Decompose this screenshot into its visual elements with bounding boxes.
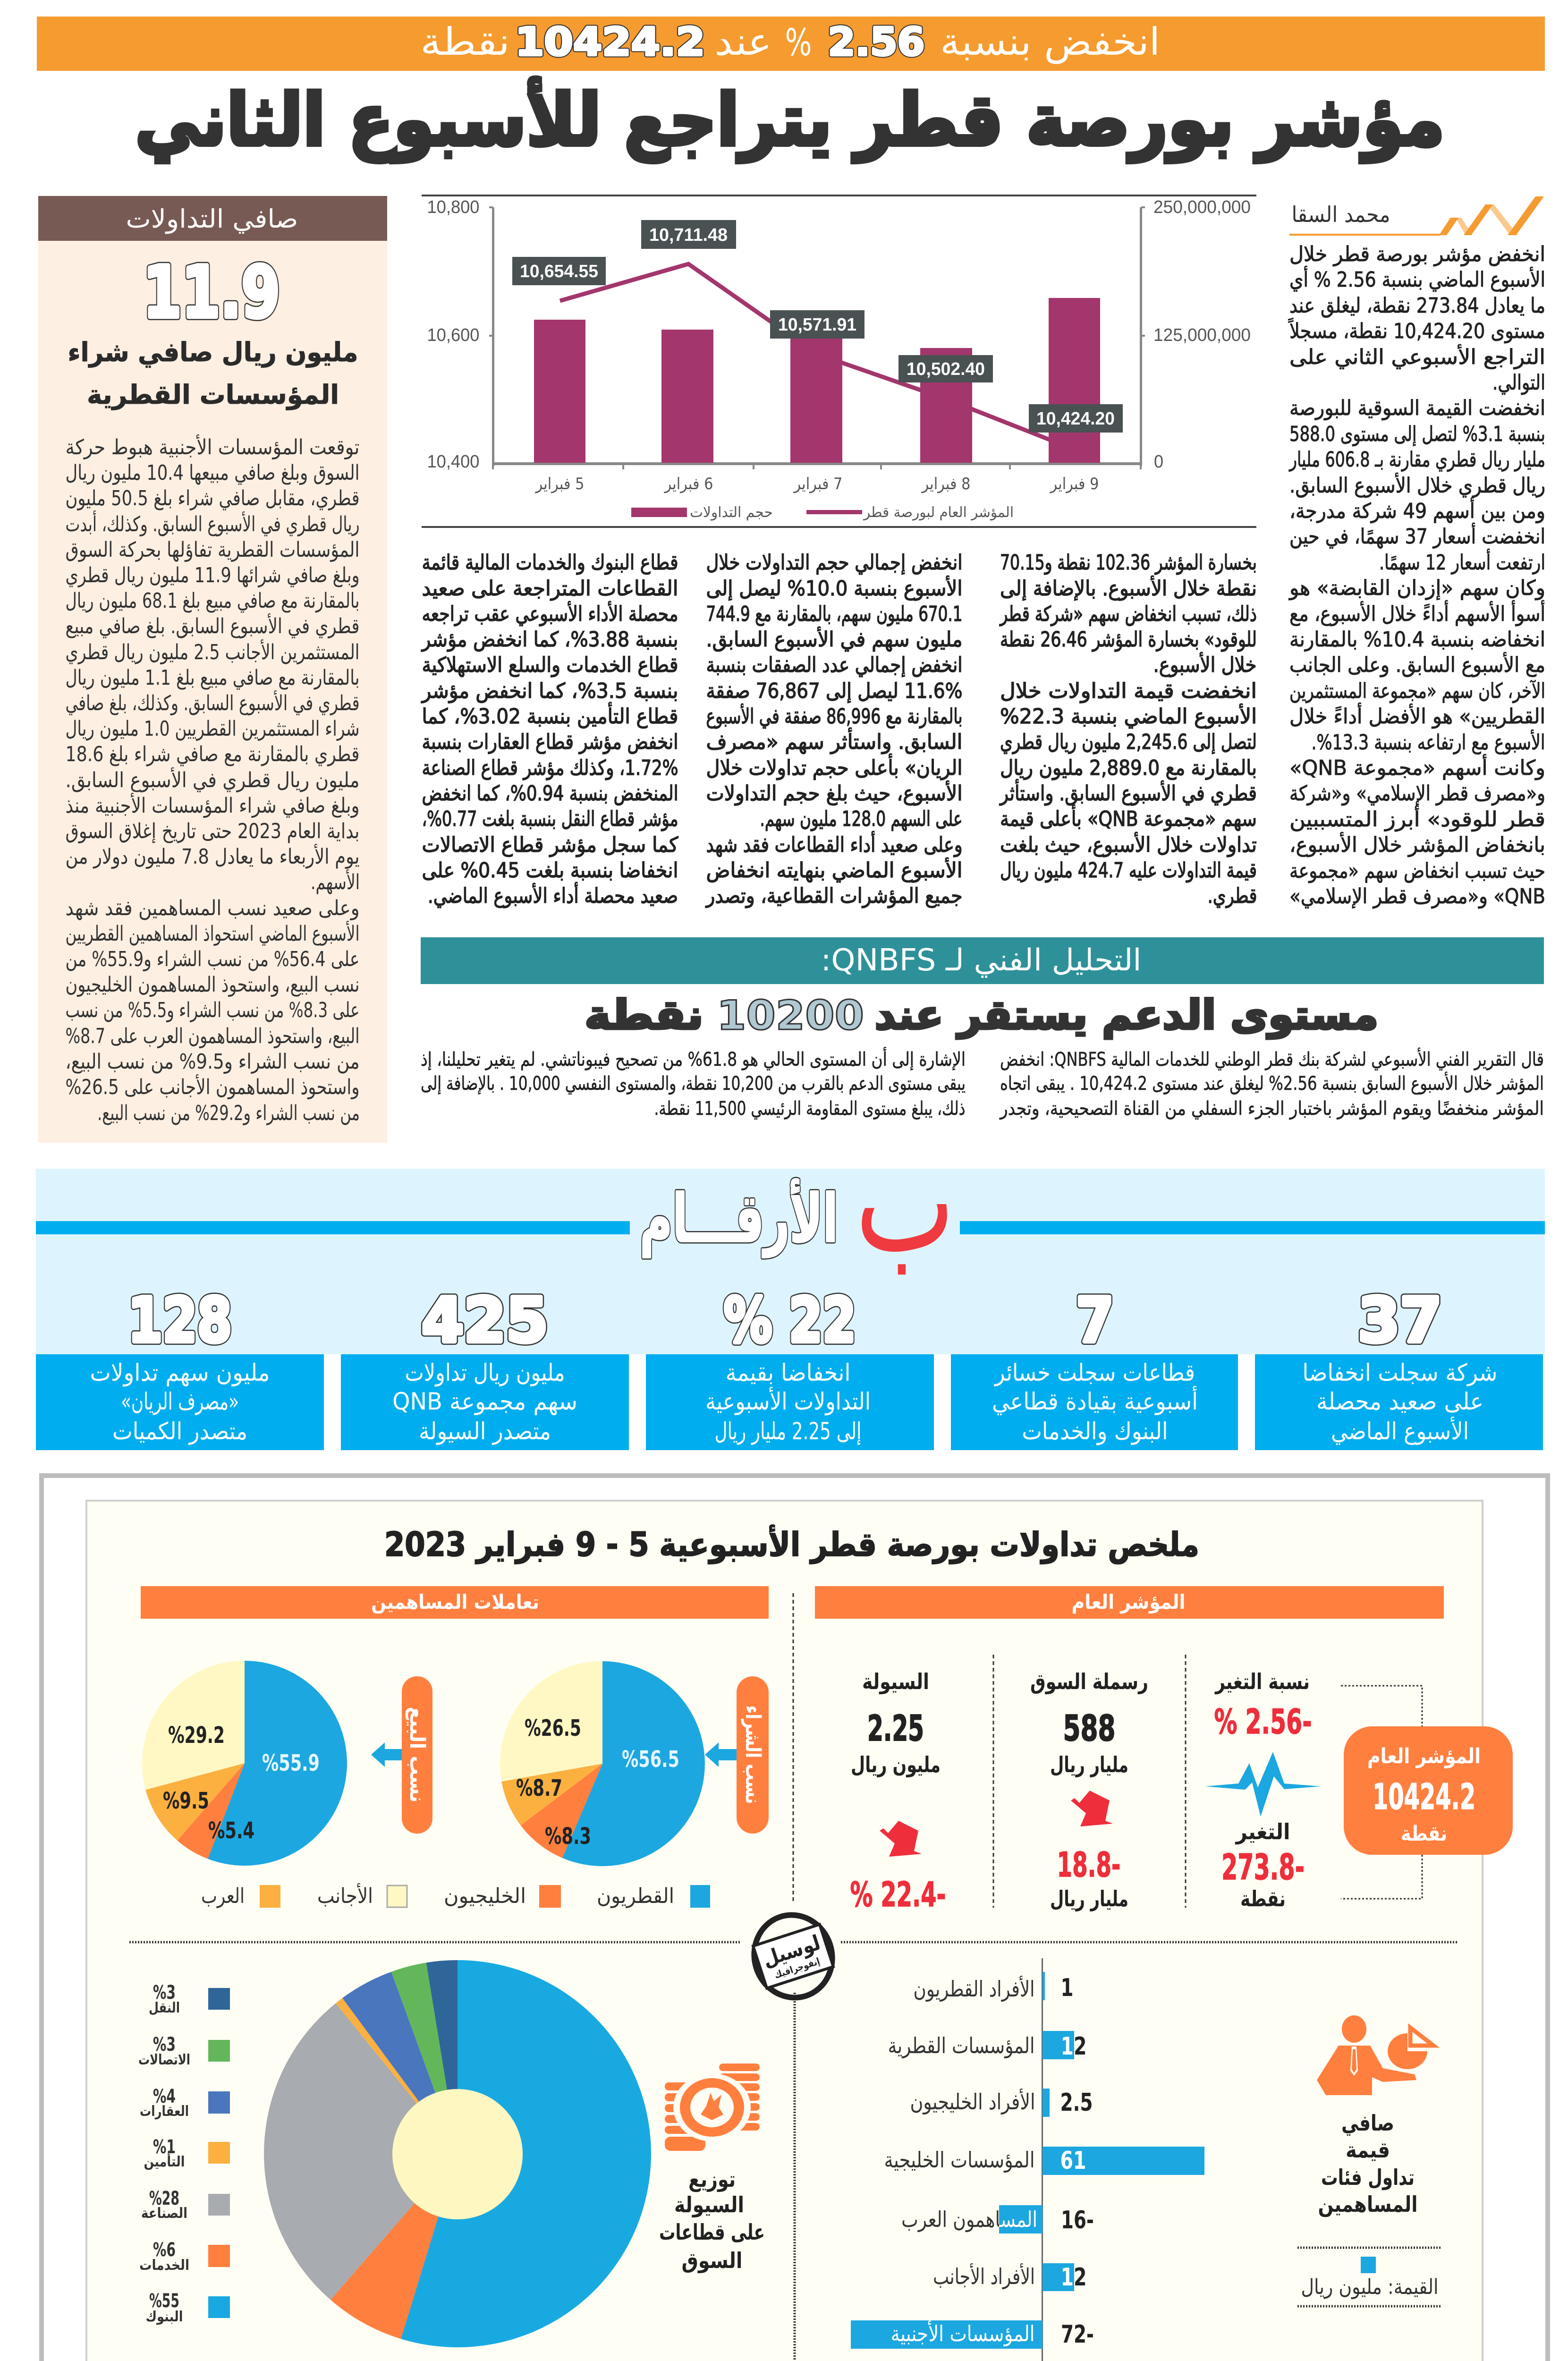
middle article column C: محصلة الأداء الأسبوعي عقب تراجعه	[422, 601, 678, 626]
panel body text: قطري بالمقارنة مع صافي شراء بلغ 18.6	[65, 742, 360, 766]
donut legend: الصناعة	[141, 2205, 187, 2222]
right column article text: انخفض مؤشر بورصة قطر خلال	[1289, 242, 1545, 266]
section heading: الأرقـــام	[640, 1179, 838, 1257]
pie legend: العرب	[201, 1884, 245, 1908]
panel body text: ريال قطري في الأسبوع السابق. وكذلك، أبدت	[65, 510, 360, 536]
stat: 37: شركة سجلت انخفاضا	[1302, 1359, 1498, 1386]
stat: 7: 7	[1076, 1284, 1114, 1356]
right column article text: QNB» و«مصرف قطر الإسلامي»	[1289, 884, 1545, 909]
panel body text: المستثمرين الأجانب 2.5 مليون ريال قطري	[66, 639, 360, 664]
header: shareholder transactions: تعاملات المساهمين	[371, 1590, 539, 1614]
middle article column A: ذلك، تسبب انخفاض سهم «شركة قطر	[999, 602, 1257, 626]
middle article column A: تداولات خلال الأسبوع، حيث بلغت	[1000, 832, 1257, 857]
bar: foreign individuals: الأفراد الأجانب	[933, 2263, 1035, 2290]
middle article column A: نقطة خلال الأسبوع. بالإضافة إلى	[1000, 575, 1257, 601]
x axis labels: 6 فبراير	[664, 475, 713, 493]
panel body text: واستحوذ المساهمون الأجانب على 26.5%	[65, 1074, 360, 1099]
section heading: ب	[855, 1119, 955, 1284]
donut title: توزيع	[688, 2166, 736, 2192]
middle article column A: قطري.	[1208, 884, 1257, 908]
panel body text: على 8.3% من نسب الشراء و5.5% من نسب	[65, 998, 360, 1022]
middle article column B	[705, 551, 962, 908]
middle article column C	[421, 551, 678, 908]
x axis labels: 9 فبراير	[1050, 475, 1099, 493]
chart legend: المؤشر العام لبورصة قطر	[863, 504, 1014, 521]
pie chart: sell shares: %5.4	[208, 1817, 254, 1844]
technical analysis heading: نقطة	[585, 992, 703, 1039]
stat: 22 percent: التداولات الأسبوعية	[705, 1387, 871, 1416]
icon: pulse	[1205, 1752, 1322, 1817]
header: general index: المؤشر العام	[1072, 1590, 1185, 1614]
middle article column C: صعيد محصلة أداء الأسبوع الماضي.	[428, 882, 678, 908]
stat: 128: 128	[128, 1284, 232, 1356]
donut legend: %28	[149, 2188, 179, 2209]
general index callout box: نقطة	[1401, 1822, 1447, 1846]
middle article column A: لتصل إلى 2,245.6 مليون ريال قطري	[1000, 730, 1257, 754]
right column article text: التوالي.	[1492, 371, 1545, 395]
panel body text: السوق وبلغ صافي مبيعها 10.4 مليون ريال	[66, 461, 360, 485]
volume bars	[534, 298, 1100, 463]
bar: Arab investors: 16-	[1061, 2206, 1094, 2234]
stat: 37: الأسبوع الماضي	[1331, 1417, 1469, 1445]
pie chart: buy shares: %8.7	[516, 1775, 562, 1801]
stat: 37	[1255, 1284, 1543, 1450]
data labels: 10,711.48	[649, 225, 728, 245]
general index callout box	[1341, 1686, 1513, 1899]
middle article column B: انخفض إجمالي عدد الصفقات بنسبة	[706, 653, 962, 677]
donut title	[659, 2166, 765, 2273]
panel body text: بداية العام 2023 حتى تاريخ إغلاق السوق	[65, 819, 359, 843]
bar chart title	[1318, 2110, 1417, 2217]
panel: net trading	[38, 196, 387, 1143]
pill: sell shares: نسب البيع	[405, 1707, 429, 1803]
right column article text: ما يعادل 273.84 نقطة، ليغلق عند	[1289, 294, 1545, 318]
panel body text: نسب البيع، واستحوذ المساهمون الخليجيون	[65, 973, 360, 997]
stat: 22 percent: انخفاضا بقيمة	[725, 1359, 851, 1386]
chart axes	[489, 206, 1145, 469]
middle article column A: انخفضت قيمة التداولات خلال	[1000, 679, 1257, 703]
stat: 128	[36, 1284, 324, 1450]
left axis labels: 10,400	[427, 452, 480, 472]
right column article text: وكانت أسهم «مجموعة QNB»	[1289, 754, 1545, 780]
donut title: على قطاعات	[659, 2219, 765, 2245]
middle article column C: المنخفض بنسبة 0.94%، كما انخفض	[422, 781, 678, 806]
metric: rate of change: 273.8-	[1221, 1846, 1305, 1888]
bar chart title: تداول فئات	[1321, 2165, 1415, 2190]
stat: 37: على صعيد محصلة	[1316, 1388, 1483, 1415]
right column article text: قطر للوقود» أبرز المتسببين	[1289, 806, 1545, 832]
donut legend: %4	[153, 2086, 176, 2107]
middle article column B: بالمقارنة مع 86,996 صفقة في الأسبوع	[706, 703, 962, 729]
middle article column B: الأسبوع الماضي بنهايته انخفاض	[706, 857, 962, 883]
metric: market cap: 18.8-	[1057, 1845, 1121, 1885]
middle article column B: 670.1 مليون سهم، بالمقارنة مع 744.9	[706, 602, 962, 626]
panel subheading: المؤسسات القطرية	[87, 380, 339, 410]
middle article column C: كما سجل مؤشر قطاع الاتصالات	[422, 833, 678, 857]
middle article column B: مليون سهم في الأسبوع السابق.	[706, 626, 962, 652]
arrow: buy to pie	[705, 1742, 737, 1767]
bar: Qatari institutions: 12	[1060, 2032, 1087, 2061]
bar: Gulf institutions	[884, 2147, 1204, 2175]
middle article column C: انخفاضا بنسبة بلغت 0.45% على	[422, 858, 678, 883]
metric: rate of change: نسبة التغير	[1214, 1669, 1310, 1694]
middle article column C: قطاع الخدمات والسلع الاستهلاكية	[422, 653, 678, 677]
stat: 425: متصدر السيولة	[419, 1418, 551, 1445]
bar: foreign individuals: 12	[1060, 2263, 1087, 2292]
middle article column B: انخفض إجمالي حجم التداولات خلال	[706, 551, 962, 575]
main title: مؤشر بورصة قطر يتراجع للأسبوع الثاني	[135, 77, 1445, 162]
stat: 7: البنوك والخدمات	[1022, 1418, 1168, 1445]
metric: rate of change: % 2.56-	[1214, 1702, 1312, 1741]
stat: 425: 425	[422, 1284, 548, 1356]
middle article column A: قيمة التداولات عليه 424.7 مليون ريال	[1000, 858, 1257, 883]
technical analysis text, left	[421, 1047, 966, 1120]
panel body text: المؤسسات القطرية تفاؤلها بحركة السوق	[65, 538, 360, 562]
bar chart legend: القيمة: مليون ريال	[1301, 2275, 1438, 2299]
middle article column C: بنسبة 3.5%، كما انخفض مؤشر	[421, 679, 678, 703]
x axis labels: 5 فبراير	[535, 475, 585, 493]
bar: Gulf institutions: 61	[1060, 2147, 1086, 2175]
panel body text: الأسهم.	[311, 869, 360, 894]
middle article column C: مؤشر قطاع النقل بنسبة بلغت 0.77%،	[422, 807, 678, 831]
bar: foreign institutions: 72-	[1061, 2320, 1094, 2349]
author byline	[1289, 196, 1544, 236]
author byline: محمد السقا	[1292, 202, 1390, 227]
metric: liquidity: مليون ريال	[851, 1752, 941, 1777]
bar: Qatari individuals: 1	[1060, 1974, 1074, 2002]
metric: liquidity	[850, 1669, 946, 1914]
donut chart: liquidity by sector	[264, 1960, 651, 2347]
top banner: عند	[715, 20, 771, 64]
general index callout box: المؤشر العام	[1367, 1744, 1481, 1768]
metric: market cap: رسملة السوق	[1030, 1669, 1148, 1694]
panel header: صافي التداولات	[126, 204, 298, 234]
stat: 22 percent: % 22	[724, 1284, 856, 1356]
middle article column C: قطاع التأمين بنسبة 3.02%، كما	[422, 702, 678, 729]
middle article column A: بخسارة المؤشر 102.36 نقطة و70.15	[1000, 551, 1257, 575]
metric: liquidity: السيولة	[862, 1669, 929, 1694]
right column article text: وكان سهم «إزدان القابضة» هو	[1288, 576, 1545, 600]
metric: market cap: 588	[1063, 1707, 1115, 1749]
panel body text: شراء المستثمرين القطريين 1.0 مليون ريال	[65, 717, 360, 741]
metric: market cap	[1030, 1669, 1148, 1911]
panel header	[38, 196, 387, 241]
panel body text: قطري في الأسبوع السابق. وكذلك، بلغ صافي	[65, 690, 360, 715]
panel subheading: مليون ريال صافي شراء	[68, 337, 358, 368]
top banner: 10424.2	[515, 20, 705, 65]
middle article column A: قطري في الأسبوع السابق. واستأثر	[999, 779, 1257, 806]
panel body text: وبلغ صافي شرائها 11.9 مليون ريال قطري	[65, 563, 360, 587]
donut legend: الاتصالات	[138, 2052, 190, 2068]
metric: rate of change	[1205, 1669, 1322, 1911]
bar: Gulf individuals: 2.5	[1060, 2089, 1093, 2117]
metric: liquidity: 2.25	[867, 1707, 924, 1749]
panel body text: مليون ريال قطري في الأسبوع السابق.	[65, 767, 360, 792]
stat: 128: مليون سهم تداولات	[90, 1359, 270, 1387]
stamp: Lusail infographic: لوسيل	[760, 1930, 823, 1972]
panel body text: البيع، واستحوذ المساهمون العرب على 8.7%	[65, 1024, 359, 1048]
right column article text: انخفضت القيمة السوقية للبورصة	[1289, 396, 1545, 420]
arrow: sell to pie	[371, 1742, 402, 1767]
bar: Qatari institutions: المؤسسات القطرية	[888, 2033, 1035, 2059]
pie legend	[201, 1883, 710, 1908]
stat: 7: 7	[1076, 1284, 1114, 1356]
middle article column B: جميع المؤشرات القطاعية، وتصدر	[705, 884, 962, 908]
big number 11.9: 11.9	[143, 252, 280, 334]
stat: 425: 425	[422, 1284, 548, 1356]
pie chart: sell shares	[142, 1661, 347, 1866]
bar: Arab investors: المساهمون العرب	[901, 2207, 1037, 2233]
bar: Qatari institutions: 12	[1060, 2032, 1087, 2061]
donut legend: %55	[149, 2290, 179, 2312]
icon: coins	[665, 2064, 760, 2151]
icon: red down arrow	[1071, 1791, 1113, 1826]
middle article column A: خلال الأسبوع.	[1153, 652, 1257, 677]
bar: Gulf individuals: الأفراد الخليجيون	[910, 2088, 1035, 2115]
stat: 22 percent: % 22	[724, 1284, 856, 1356]
middle article column B: الأسبوع، حيث بلغ حجم التداولات	[706, 780, 962, 806]
donut legend: العقارات	[140, 2103, 189, 2120]
pie chart: buy shares	[500, 1661, 705, 1866]
bar: foreign individuals: 12	[1060, 2263, 1087, 2292]
middle article column B: الريان» بأعلى حجم تداولات خلال	[706, 753, 962, 780]
panel body text: على 56.4% من نسب الشراء و55.9% من	[65, 947, 360, 971]
metric: liquidity: % 22.4-	[850, 1875, 946, 1914]
bar chart title: قيمة	[1346, 2137, 1390, 2163]
donut legend: البنوك	[145, 2309, 183, 2325]
panel: by the numbers	[36, 1119, 1545, 1450]
bar: foreign institutions	[851, 2320, 1094, 2349]
middle article column A: بالمقارنة مع 2,889.0 مليون ريال	[1000, 756, 1257, 780]
middle article column B: وعلى صعيد أداء القطاعات فقد شهد	[706, 831, 962, 857]
pie chart: buy shares: %56.5	[622, 1746, 679, 1773]
bar chart title: المساهمين	[1318, 2191, 1417, 2217]
metric: market cap: مليار ريال	[1050, 1752, 1128, 1777]
data labels	[512, 220, 1123, 433]
technical analysis banner	[421, 937, 1544, 984]
data labels: 10,571.91	[778, 315, 856, 335]
pie legend: القطريون	[597, 1884, 674, 1908]
technical analysis text, left: يبقى مستوى الدعم بالقرب من 10,200 نقطة، والمستوى النفسي 10,000 . بالإضافة إلى	[421, 1073, 966, 1095]
icon: red down arrow	[880, 1821, 922, 1857]
bar chart title: صافي	[1341, 2110, 1394, 2136]
icon: zigzag trend	[1439, 196, 1544, 235]
stat: 37: 37	[1358, 1284, 1442, 1356]
panel body text: بالمقارنة مع صافي مبيع بلغ 68.1 مليون ريال	[66, 589, 360, 613]
top banner: انخفض بنسبة	[940, 20, 1160, 64]
bar chart legend	[1297, 2248, 1441, 2306]
right column article text: القطريين» هو الأفضل أداءً خلال	[1289, 703, 1545, 729]
technical analysis banner: التحليل الفني لـ QNBFS:	[821, 943, 1142, 978]
panel body text: من نسب الشراء و9.5% من نسب البيع،	[66, 1050, 360, 1074]
middle article column A: الأسبوع الماضي بنسبة 22.3%	[1000, 703, 1257, 729]
bar: foreign institutions: المؤسسات الأجنبية	[890, 2320, 1035, 2347]
technical analysis text, right	[999, 1047, 1544, 1120]
general index callout box: 10424.2	[1373, 1776, 1475, 1817]
big number 11.9: 11.9	[143, 252, 280, 334]
left axis labels	[427, 197, 480, 472]
technical analysis text, left: ذلك، يبلغ مستوى المقاومة الرئيسي 11,500 نقطة.	[654, 1098, 965, 1120]
donut legend: التأمين	[144, 2152, 185, 2170]
right axis labels: 0	[1154, 452, 1163, 472]
panel: weekly summary infographic	[42, 1476, 1548, 2361]
middle article column B: 11.6% ليصل إلى 76,867 صفقة	[706, 679, 962, 703]
right column article text: انخفضت أسعار 37 سهمًا، في حين	[1289, 523, 1545, 549]
panel body text: قطري في الأسبوع السابق. بلغ صافي مبيع	[65, 613, 360, 638]
x axis labels	[535, 475, 1099, 493]
donut legend: %3	[153, 2034, 176, 2055]
donut legend: %6	[153, 2239, 176, 2261]
top banner	[37, 17, 1545, 71]
middle article column B: الأسبوع بنسبة 10.0% ليصل إلى	[706, 575, 962, 601]
panel body text: وبلغ صافي شراء المؤسسات الأجنبية منذ	[65, 792, 360, 818]
pie legend: الخليجيون	[444, 1884, 526, 1908]
data labels: 10,502.40	[907, 359, 985, 379]
index line	[560, 264, 1075, 450]
right column article text: ومن بين أسهم 49 شركة مدرجة،	[1289, 497, 1545, 523]
right column article text: التراجع الأسبوعي الثاني على	[1289, 344, 1545, 369]
middle article column B: على السهم 128.0 مليون سهم.	[760, 807, 962, 831]
middle article column C: قطاع البنوك والخدمات المالية قائمة	[422, 551, 678, 575]
data labels: 10,424.20	[1036, 409, 1115, 429]
section heading: الأرقـــام	[640, 1179, 838, 1257]
bar chart: net value by investor group	[851, 1958, 1204, 2361]
left axis labels: 10,600	[427, 325, 480, 345]
bar: Qatari individuals: الأفراد القطريون	[913, 1975, 1035, 2002]
left axis labels: 10,800	[427, 197, 480, 217]
right axis labels	[1153, 197, 1251, 472]
top banner: %	[785, 22, 812, 64]
technical analysis heading	[585, 992, 1379, 1039]
donut legend: الخدمات	[139, 2257, 189, 2274]
pie chart: buy shares: %8.3	[545, 1823, 591, 1850]
metric: market cap: مليار ريال	[1050, 1886, 1128, 1911]
icon: presenter with pie	[1317, 2015, 1433, 2095]
stat: 425	[341, 1284, 629, 1450]
donut title: السيولة	[674, 2192, 744, 2217]
middle article column A: سهم «مجموعة QNB» بأعلى قيمة	[1000, 804, 1257, 831]
middle article column C: 1.72%، وكذلك مؤشر قطاع الصناعة	[422, 756, 678, 780]
top banner: 10424.2	[515, 20, 705, 65]
technical analysis heading: مستوى الدعم يستقر عند	[874, 992, 1379, 1039]
right axis labels: 250,000,000	[1153, 197, 1251, 217]
stat: 7: أسبوعية بقيادة قطاعي	[992, 1386, 1198, 1415]
stat: 37: 37	[1358, 1284, 1442, 1356]
panel body text: يوم الأربعاء ما يعادل 7.8 مليون دولار من	[65, 843, 359, 869]
middle article column B: السابق. واستأثر سهم «مصرف	[706, 727, 962, 754]
stat: 128: «مصرف الريان»	[121, 1388, 239, 1415]
middle article column A: للوقود» بخسارة المؤشر 26.46 نقطة	[1000, 628, 1257, 652]
chart legend: حجم التداولات	[690, 504, 773, 521]
panel body text: الأسبوع الماضي استحواذ المساهمين القطريين	[65, 920, 360, 946]
section heading	[640, 1119, 955, 1284]
technical analysis text, left: الإشارة إلى أن المستوى الحالي هو 61.8% من تصحيح فيبوناتشي. لم يتغير تحليلنا، إذ	[421, 1047, 966, 1070]
header: general index	[815, 1586, 1444, 1619]
stamp: Lusail infographic: إنفوجرافيك	[773, 1955, 821, 1981]
middle article column C: القطاعات المتراجعة على صعيد	[422, 577, 678, 601]
pill: buy shares: نسب الشراء	[741, 1706, 765, 1804]
donut legend: النقل	[149, 2000, 180, 2016]
right column article text: مع الأسبوع السابق. وعلى الجانب	[1289, 652, 1545, 677]
panel body text: وعلى صعيد نسب المساهمين فقد شهد	[65, 896, 360, 920]
pie chart: sell shares: %55.9	[262, 1750, 320, 1776]
data labels: 10,654.55	[520, 262, 598, 281]
panel body text: من نسب الشراء و29.2% من نسب البيع.	[97, 1101, 360, 1125]
middle article column C: انخفض مؤشر قطاع العقارات بنسبة	[422, 730, 678, 754]
pie legend: الأجانب	[317, 1883, 373, 1908]
technical analysis heading: 10200	[717, 992, 864, 1039]
pie chart: buy shares: %26.5	[525, 1715, 581, 1741]
stat: 22 percent: إلى 2.25 مليار ريال	[715, 1418, 861, 1445]
panel subheading	[68, 337, 358, 410]
panel body text: قطري، مقابل صافي شراء بلغ 50.5 مليون	[65, 486, 359, 510]
header: shareholder transactions	[141, 1586, 769, 1619]
chart legend	[631, 504, 1014, 521]
donut legend: %1	[153, 2136, 176, 2158]
stat: 128: متصدر الكميات	[112, 1418, 247, 1445]
stat: 22 percent	[646, 1284, 934, 1450]
metric: rate of change: التغير	[1235, 1819, 1290, 1844]
metric: rate of change: نقطة	[1240, 1886, 1286, 1911]
pie chart: sell shares: %9.5	[163, 1788, 209, 1814]
panel body text	[65, 434, 360, 1125]
bar: Arab investors: المساهمون العرب	[901, 2207, 1037, 2233]
right column article text: الأسبوع الماضي بنسبة 2.56 % أي	[1289, 266, 1545, 292]
right column article text: ارتفعت أسعار 12 سهمًا.	[1379, 549, 1545, 575]
pie chart: sell shares: %29.2	[168, 1722, 225, 1749]
donut legend: %3	[153, 1982, 176, 2004]
stat: 7	[951, 1284, 1238, 1450]
donut legend	[138, 1982, 230, 2325]
top banner: نقطة	[420, 20, 510, 64]
chart: index and trading volume	[422, 195, 1256, 528]
x axis labels: 7 فبراير	[793, 475, 842, 493]
top banner: 2.56	[828, 20, 924, 65]
stat: 425: سهم مجموعة QNB	[392, 1388, 577, 1416]
pill: sell shares	[402, 1676, 432, 1834]
x axis labels: 8 فبراير	[921, 475, 971, 493]
donut title: السوق	[682, 2248, 742, 2273]
middle article column A	[999, 551, 1257, 908]
pill: buy shares	[737, 1676, 769, 1834]
panel body text: بالمقارنة مع صافي مبيع بلغ 1.1 مليون ريال	[65, 666, 360, 690]
right column article text: انخفاضه بنسبة 10.4% بالمقارنة	[1289, 628, 1545, 652]
right column article text: مستوى 10,424.20 نقطة، مسجلاً	[1288, 318, 1545, 343]
middle article column C: بنسبة 3.88%، كما انخفض مؤشر	[421, 628, 678, 652]
stat: 7: قطاعات سجلت خسائر	[993, 1359, 1195, 1386]
right column article text: بانخفاض المؤشر خلال الأسبوع،	[1289, 832, 1545, 857]
right column article text: بنسبة 3.1% لتصل إلى مستوى 588.0	[1289, 422, 1545, 446]
stat: 128: 128	[128, 1284, 232, 1356]
stat: 425: مليون ريال تداولات	[405, 1359, 565, 1387]
panel body text: توقعت المؤسسات الأجنبية هبوط حركة	[65, 434, 360, 459]
bar: Gulf institutions: المؤسسات الخليجية	[884, 2147, 1035, 2173]
right axis labels: 125,000,000	[1153, 325, 1251, 345]
stamp: Lusail infographic	[744, 1905, 843, 2008]
top banner: 2.56	[828, 20, 924, 65]
summary title: ملخص تداولات بورصة قطر الأسبوعية 5 - 9 فبراير 2023	[384, 1525, 1199, 1564]
right column article text	[1288, 242, 1545, 909]
